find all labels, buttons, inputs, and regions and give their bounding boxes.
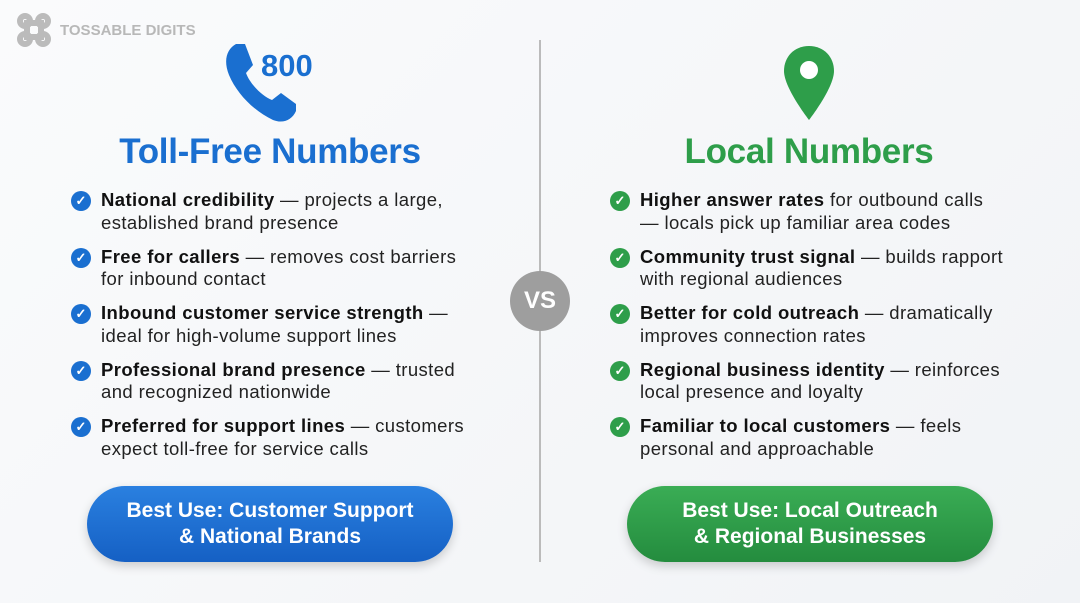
list: local benefits: improves connection rates <box>640 324 866 346</box>
vs badge <box>510 271 570 331</box>
list: toll-free benefits: ✓ <box>76 193 86 208</box>
list: local benefits: Community trust signal — builds rapport <box>640 246 1003 266</box>
list: local benefits: Regional business identity — reinforces <box>640 358 1000 380</box>
list: toll-free benefits: ✓ <box>76 362 86 378</box>
logo: TOSSABLE DIGITS <box>60 22 196 38</box>
list: toll-free benefits: established brand presence <box>101 212 339 232</box>
list: toll-free benefits <box>71 189 464 459</box>
list: toll-free benefits: ✓ <box>76 250 86 264</box>
list: local benefits: Higher answer rates for outbound calls <box>640 189 983 210</box>
divider <box>539 40 541 562</box>
list: local benefits: ✓ <box>615 306 625 321</box>
button: toll-free best use <box>87 486 453 562</box>
icon: phone 800: 800 <box>261 48 313 83</box>
title: local: Local Numbers <box>685 132 933 171</box>
list: toll-free benefits: National credibility — projects a large, <box>101 189 443 210</box>
list: toll-free benefits: Preferred for support lines — customers <box>101 415 464 436</box>
list: toll-free benefits: ✓ <box>76 306 86 321</box>
list: local benefits: — locals pick up familiar area codes <box>640 212 951 232</box>
button: toll-free best use: & National Brands <box>179 525 361 548</box>
list: toll-free benefits: ideal for high-volume support lines <box>101 324 397 346</box>
list: toll-free benefits: Inbound customer service strength — <box>101 302 448 323</box>
list: local benefits: Better for cold outreach — dramatically <box>640 302 993 323</box>
list: local benefits: ✓ <box>615 419 625 434</box>
list: toll-free benefits: for inbound contact <box>101 268 266 289</box>
logo <box>17 13 196 47</box>
button: local best use: Best Use: Local Outreach <box>682 499 938 522</box>
icon: phone 800 <box>226 44 313 122</box>
list: local benefits: personal and approachable <box>640 438 874 458</box>
list: local benefits: ✓ <box>615 362 625 378</box>
list: local benefits: with regional audiences <box>640 268 843 289</box>
list: toll-free benefits: expect toll-free for service calls <box>101 438 369 458</box>
title: toll-free: Toll-Free Numbers <box>119 132 421 171</box>
list: toll-free benefits: and recognized nationwide <box>101 381 331 402</box>
icon: location pin <box>784 46 834 120</box>
list: toll-free benefits: ✓ <box>76 419 86 434</box>
button: local best use <box>627 486 993 562</box>
button: toll-free best use: Best Use: Customer Support <box>126 499 414 522</box>
list: local benefits: ✓ <box>615 250 625 264</box>
list: local benefits: ✓ <box>615 193 625 208</box>
list: toll-free benefits: Professional brand presence — trusted <box>101 358 455 380</box>
vs badge: VS <box>524 287 556 314</box>
list: toll-free benefits: Free for callers — removes cost barriers <box>101 246 456 266</box>
list: local benefits: local presence and loyalty <box>640 381 863 402</box>
button: local best use: & Regional Businesses <box>694 525 926 548</box>
list: local benefits <box>610 189 1003 459</box>
list: local benefits: Familiar to local customers — feels <box>640 415 961 436</box>
